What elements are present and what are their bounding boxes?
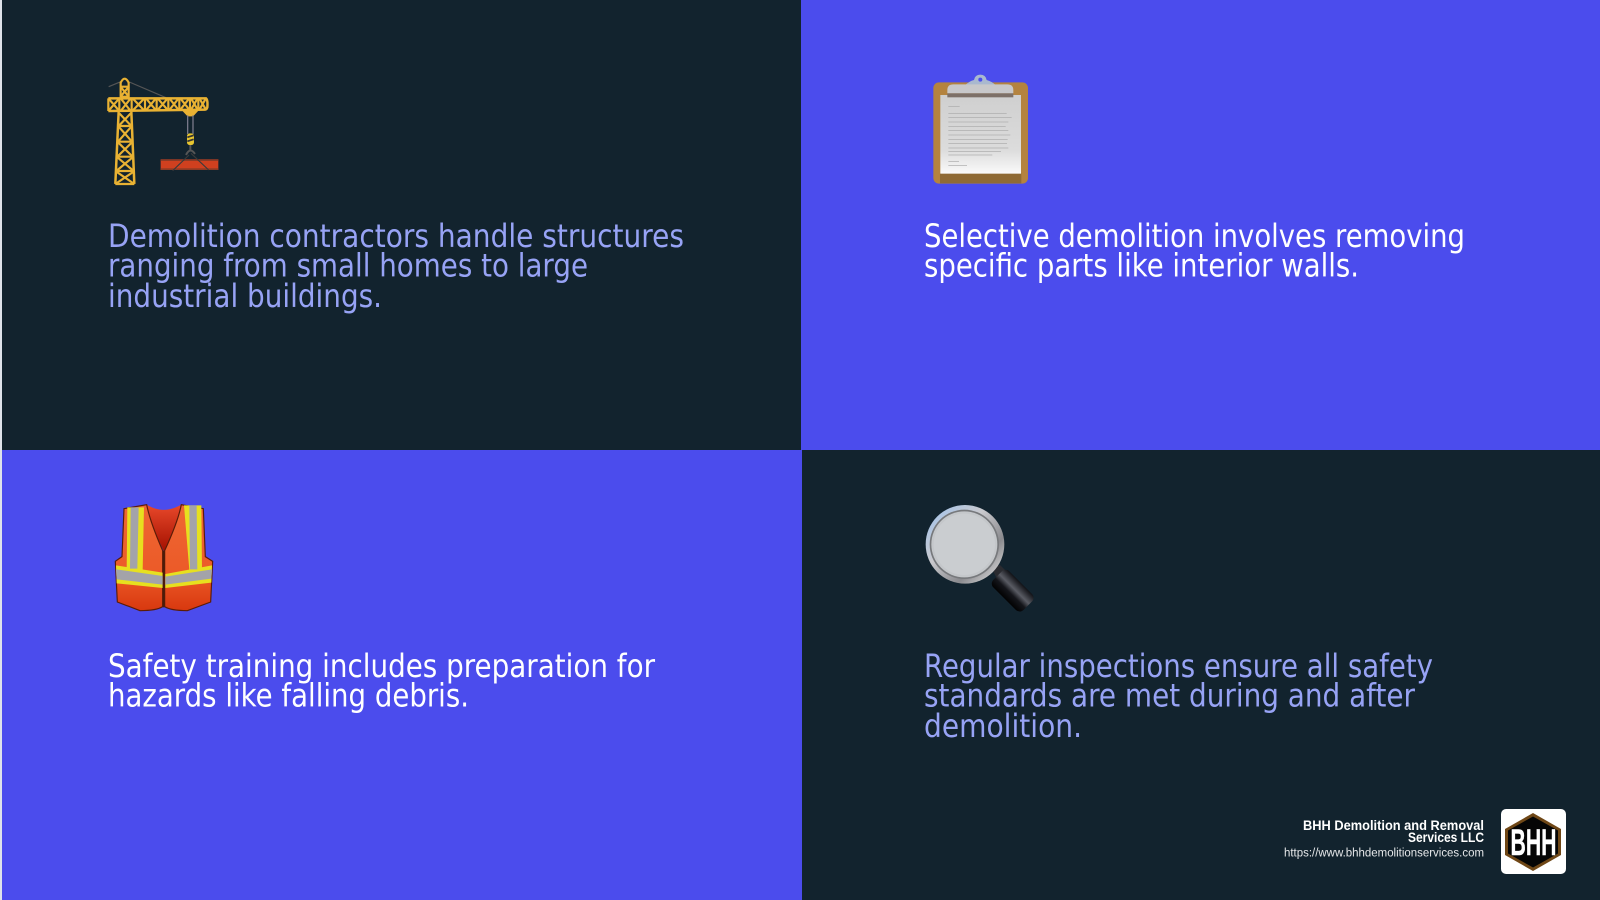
text: contractors bbox=[108, 217, 684, 315]
footer: company name and url: BHH Demolition and Removal bbox=[1303, 818, 1484, 833]
text: selective demolition bbox=[924, 217, 1465, 284]
footer: company name and url: Services LLC bbox=[1408, 830, 1484, 845]
panel: top left, contractors bbox=[2, 0, 801, 450]
logo: BHH badge bbox=[1501, 809, 1566, 874]
panel: top right, selective demolition bbox=[801, 0, 1600, 450]
logo: BHH badge: BHH bbox=[1510, 822, 1556, 863]
footer: company name and url bbox=[1284, 818, 1484, 860]
text: selective demolition: Selective demolition involves removing bbox=[924, 217, 1465, 255]
footer: company name and url: https://www.bhhdemolitionservices.com bbox=[1284, 848, 1484, 860]
icon: tower crane bbox=[108, 79, 218, 184]
text: safety training: Safety training includes preparation for bbox=[108, 647, 656, 685]
text: inspections: standards are met during and after bbox=[924, 676, 1416, 714]
text: contractors: ranging from small homes to large bbox=[108, 246, 588, 284]
icon: magnifying glass bbox=[926, 505, 1036, 614]
text: inspections: demolition. bbox=[924, 707, 1082, 745]
text: selective demolition: specific parts like interior walls. bbox=[924, 246, 1359, 284]
panel: bottom right, inspections bbox=[802, 450, 1600, 900]
icon: clipboard bbox=[933, 75, 1028, 184]
text: safety training: hazards like falling debris. bbox=[108, 676, 469, 714]
text: contractors: Demolition contractors handle structures bbox=[108, 217, 684, 255]
text: safety training bbox=[108, 647, 656, 714]
left edge strip bbox=[0, 0, 2, 900]
text: inspections: Regular inspections ensure all safety bbox=[924, 647, 1433, 685]
text: contractors: industrial buildings. bbox=[108, 277, 382, 315]
text: inspections bbox=[924, 647, 1433, 745]
icon: safety vest bbox=[115, 505, 213, 611]
panel: bottom left, safety training bbox=[2, 450, 802, 900]
